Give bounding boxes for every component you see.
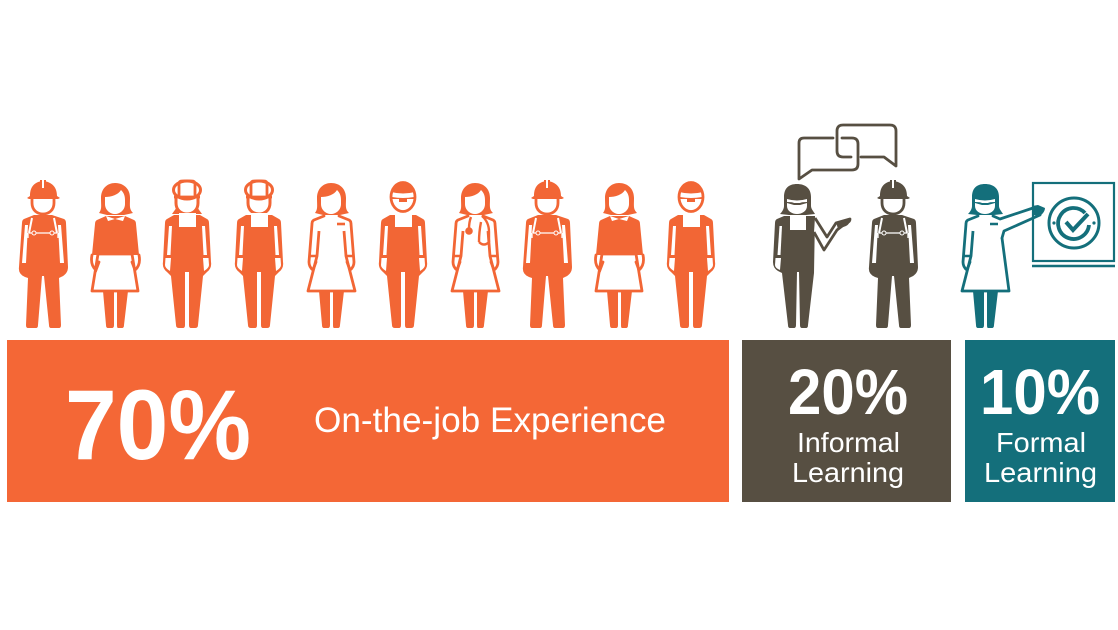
figure: engineer in outline helmet — [235, 181, 283, 328]
figure: woman in skirt — [596, 183, 644, 328]
label: on-the-job experience: On-the-job Experience — [314, 401, 666, 440]
stat: 20%: 20% — [788, 356, 908, 428]
figure: woman in dress — [308, 183, 355, 328]
label: formal: Formal — [996, 427, 1086, 458]
stat: 70%: 70% — [65, 369, 251, 480]
figure: worker with goggles — [667, 182, 715, 328]
icon: presentation board with check mark — [1032, 183, 1115, 266]
figure: worker with hard hat — [523, 179, 572, 328]
figure: worker in outline helmet — [163, 181, 211, 328]
label: learning: Learning — [792, 457, 904, 488]
label: informal: Informal — [797, 427, 900, 458]
figure: doctor with stethoscope — [452, 183, 499, 328]
figure: worker listening — [869, 179, 918, 328]
stat: 10%: 10% — [980, 356, 1100, 428]
panel: 20% informal learning — [742, 340, 951, 502]
panel: 70% on-the-job experience — [7, 340, 729, 502]
panel: 10% formal learning — [965, 340, 1115, 502]
figure: worker with goggles — [379, 182, 427, 328]
icon: speech bubbles — [799, 125, 896, 179]
figure: woman in skirt — [92, 183, 140, 328]
figure: trainer pointing — [962, 184, 1045, 328]
figure: woman explaining — [773, 184, 850, 328]
label: learning: Learning — [984, 457, 1097, 488]
figure: worker with hard hat — [19, 179, 68, 328]
